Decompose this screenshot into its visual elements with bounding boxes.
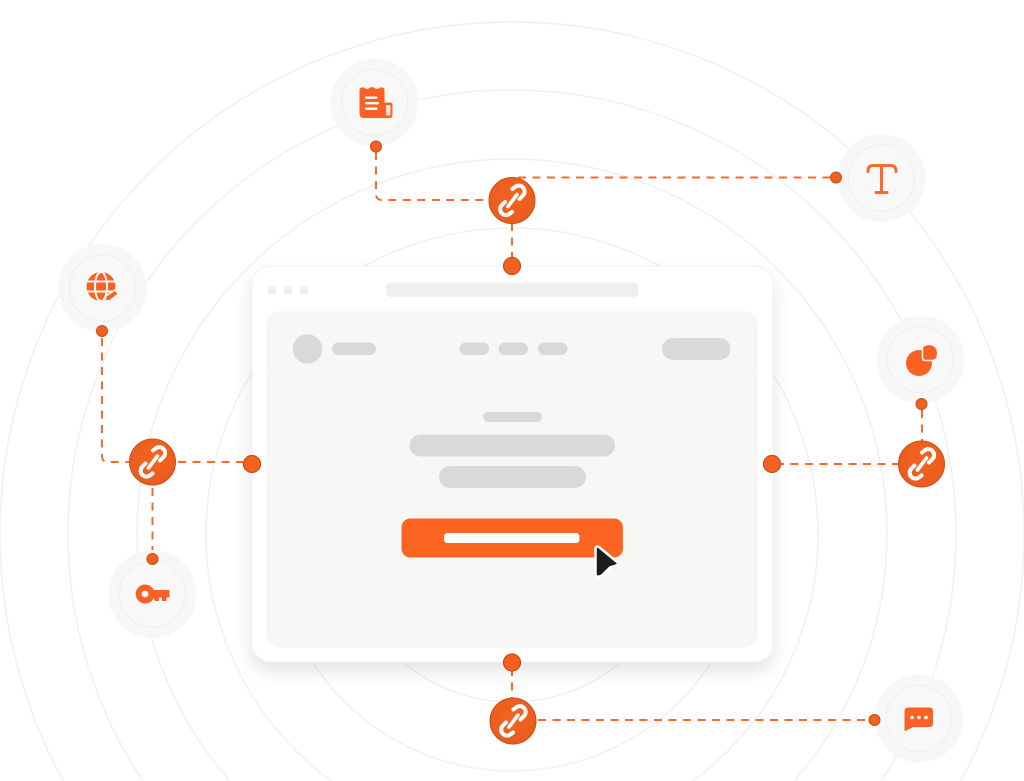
nav links <box>460 342 568 355</box>
connector dot <box>147 554 158 564</box>
connector dot <box>869 714 880 726</box>
link node: left <box>130 439 176 485</box>
icon node: key <box>108 550 196 638</box>
icon node: document <box>330 58 418 152</box>
page panel <box>267 312 757 647</box>
link node: top <box>489 178 535 224</box>
address bar <box>386 282 638 297</box>
connector dot <box>96 326 108 336</box>
link node: bottom <box>490 698 536 744</box>
headline placeholder 1 <box>410 434 615 456</box>
icon: cursor <box>596 547 618 577</box>
icon node: pie chart <box>876 316 964 410</box>
nav divider <box>267 374 757 375</box>
call to action button <box>402 518 623 558</box>
nav avatar <box>293 334 322 364</box>
dashed connector lines <box>102 152 922 720</box>
icon node: chat <box>869 674 963 762</box>
connector dot <box>830 172 842 183</box>
anchor dots on browser window <box>244 258 780 671</box>
connector dot <box>370 141 382 152</box>
headline placeholder 2 <box>439 466 586 488</box>
window frame <box>252 266 773 662</box>
window control dots <box>267 286 309 295</box>
link node: right <box>898 441 944 487</box>
connector dot <box>916 398 927 410</box>
icon node: globe edit <box>58 244 146 336</box>
nav button <box>662 338 730 360</box>
browser window <box>252 266 773 662</box>
eyebrow text placeholder <box>483 412 542 422</box>
nav brand <box>332 342 376 355</box>
icon node: text <box>830 134 926 222</box>
